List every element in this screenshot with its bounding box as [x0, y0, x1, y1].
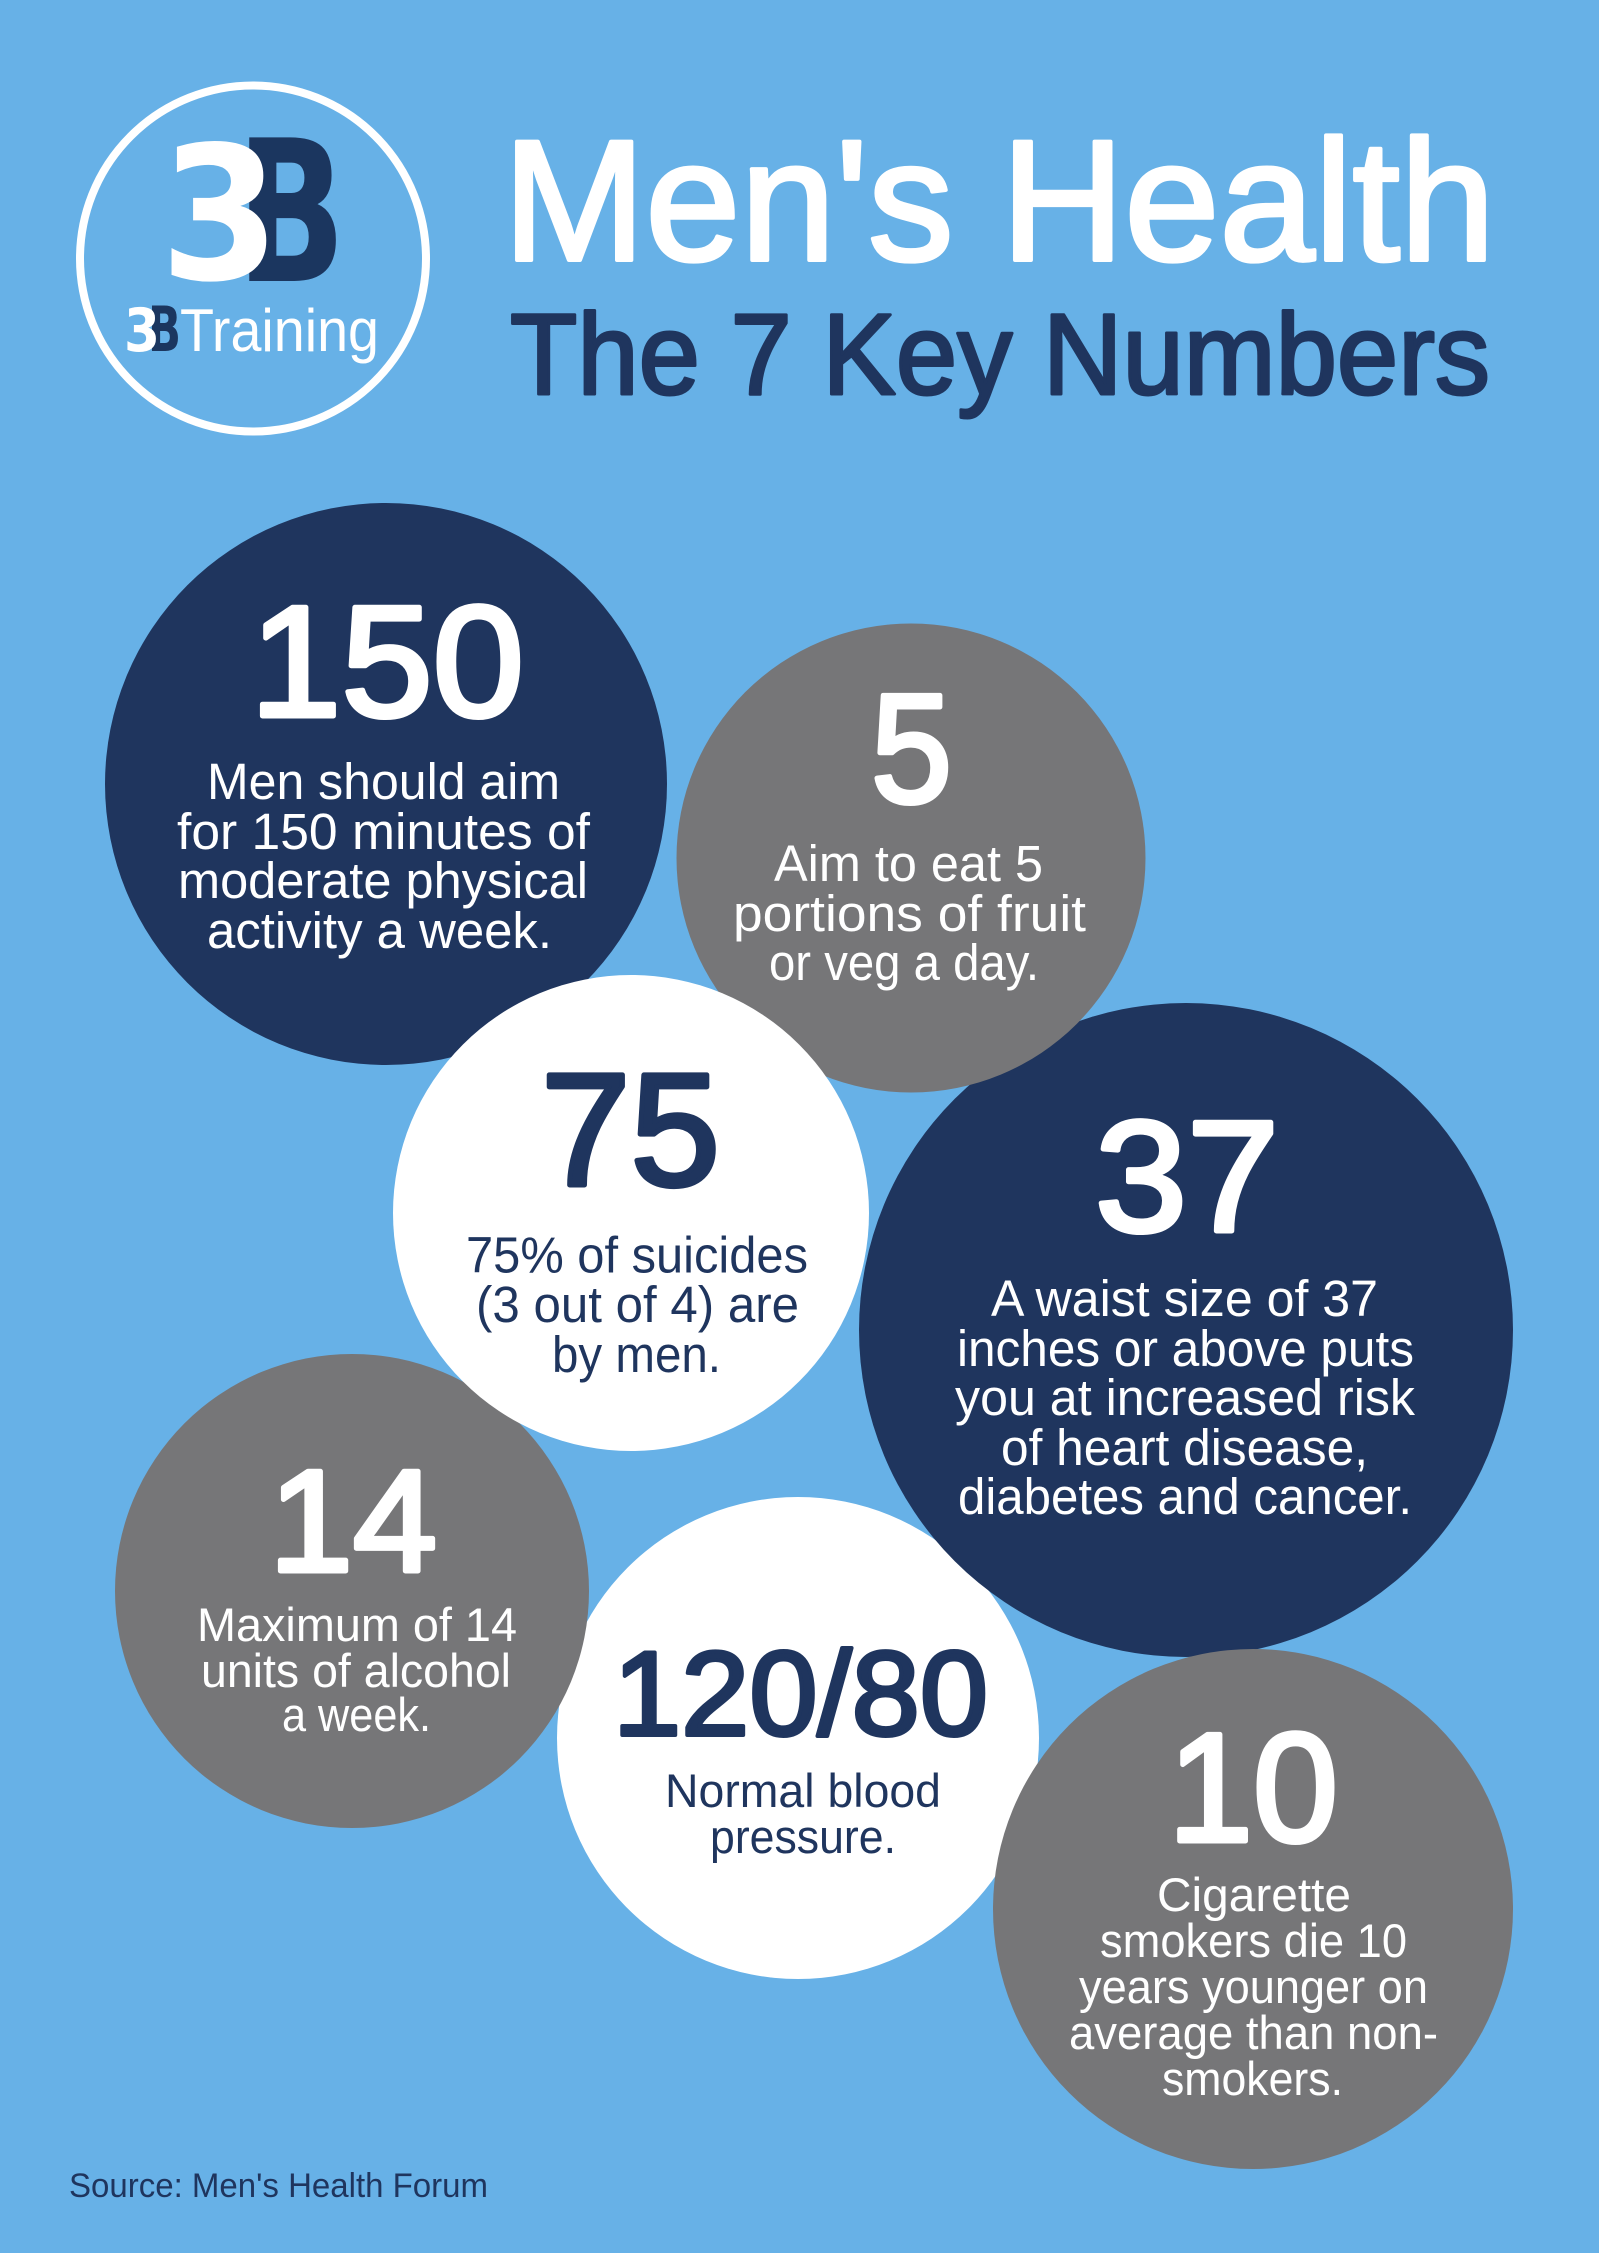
panel: 14 units of alcohol circle: Maximum of 14 [197, 1598, 517, 1651]
panel: 120/80 blood pressure circle: 120/80 [613, 1627, 988, 1761]
panel: 75 percent circle [393, 975, 869, 1451]
panel: 75 percent circle: 75 [541, 1040, 720, 1219]
panel: 5 portions circle: portions of fruit [733, 885, 1086, 942]
panel: 5 portions circle [676, 624, 1146, 1092]
panel: 37 inch waist circle: you at increased risk [955, 1369, 1415, 1426]
panel: 150 minutes circle [105, 503, 667, 1065]
panel: 120/80 blood pressure circle: pressure. [710, 1810, 896, 1863]
panel: 75 percent circle: 75% of suicides [466, 1226, 808, 1284]
panel: 10 years circle: Cigarette [1157, 1868, 1351, 1921]
logo: 3B Training: Training [180, 297, 379, 364]
panel: 37 inch waist circle: inches or above puts [957, 1320, 1414, 1377]
title: Men's Health [503, 105, 1495, 297]
subtitle: The 7 Key Numbers [510, 291, 1490, 419]
logo: 3B Training: B [236, 99, 346, 328]
panel: 10 years circle: smokers die 10 [1100, 1914, 1407, 1967]
logo: 3B Training: B [148, 293, 181, 366]
panel: 14 units of alcohol circle [115, 1354, 589, 1828]
panel: 10 years circle: 10 [1168, 1701, 1338, 1874]
panel: 5 portions circle: 5 [871, 662, 952, 835]
panel: 10 years circle [993, 1649, 1513, 2169]
panel: 37 inch waist circle: of heart disease, [1001, 1419, 1368, 1476]
panel: 37 inch waist circle: diabetes and cancer. [958, 1468, 1412, 1525]
panel: 37 inch waist circle [859, 1003, 1513, 1657]
panel: 150 minutes circle: 150 [250, 574, 524, 750]
panel: 150 minutes circle: moderate physical [178, 852, 588, 909]
source note: Source: Men's Health Forum [69, 2167, 488, 2205]
logo: 3B Training: 3 [160, 106, 280, 323]
panel: 5 portions circle: or veg a day. [769, 934, 1039, 991]
panel: 75 percent circle: by men. [552, 1326, 721, 1383]
panel: 150 minutes circle: activity a week. [207, 902, 552, 959]
panel: 10 years circle: smokers. [1162, 2052, 1343, 2105]
panel: 14 units of alcohol circle: 14 [269, 1440, 437, 1602]
panel: 5 portions circle: Aim to eat 5 [774, 835, 1043, 892]
panel: 150 minutes circle: for 150 minutes of [177, 803, 591, 860]
panel: 14 units of alcohol circle: units of alcohol [201, 1644, 511, 1697]
panel: 37 inch waist circle: 37 [1095, 1089, 1279, 1265]
panel: 37 inch waist circle: A waist size of 37 [991, 1270, 1378, 1327]
panel: 120/80 blood pressure circle [557, 1497, 1039, 1979]
panel: 10 years circle: years younger on [1079, 1960, 1428, 2013]
panel: 10 years circle: average than non- [1069, 2006, 1438, 2059]
panel: 150 minutes circle: Men should aim [207, 753, 560, 810]
logo: 3B Training: 3 [124, 296, 160, 366]
panel: 14 units of alcohol circle: a week. [282, 1688, 431, 1741]
panel: 120/80 blood pressure circle: Normal blood [665, 1764, 941, 1817]
logo: 3B Training [80, 86, 426, 432]
panel: 75 percent circle: (3 out of 4) are [476, 1276, 799, 1333]
